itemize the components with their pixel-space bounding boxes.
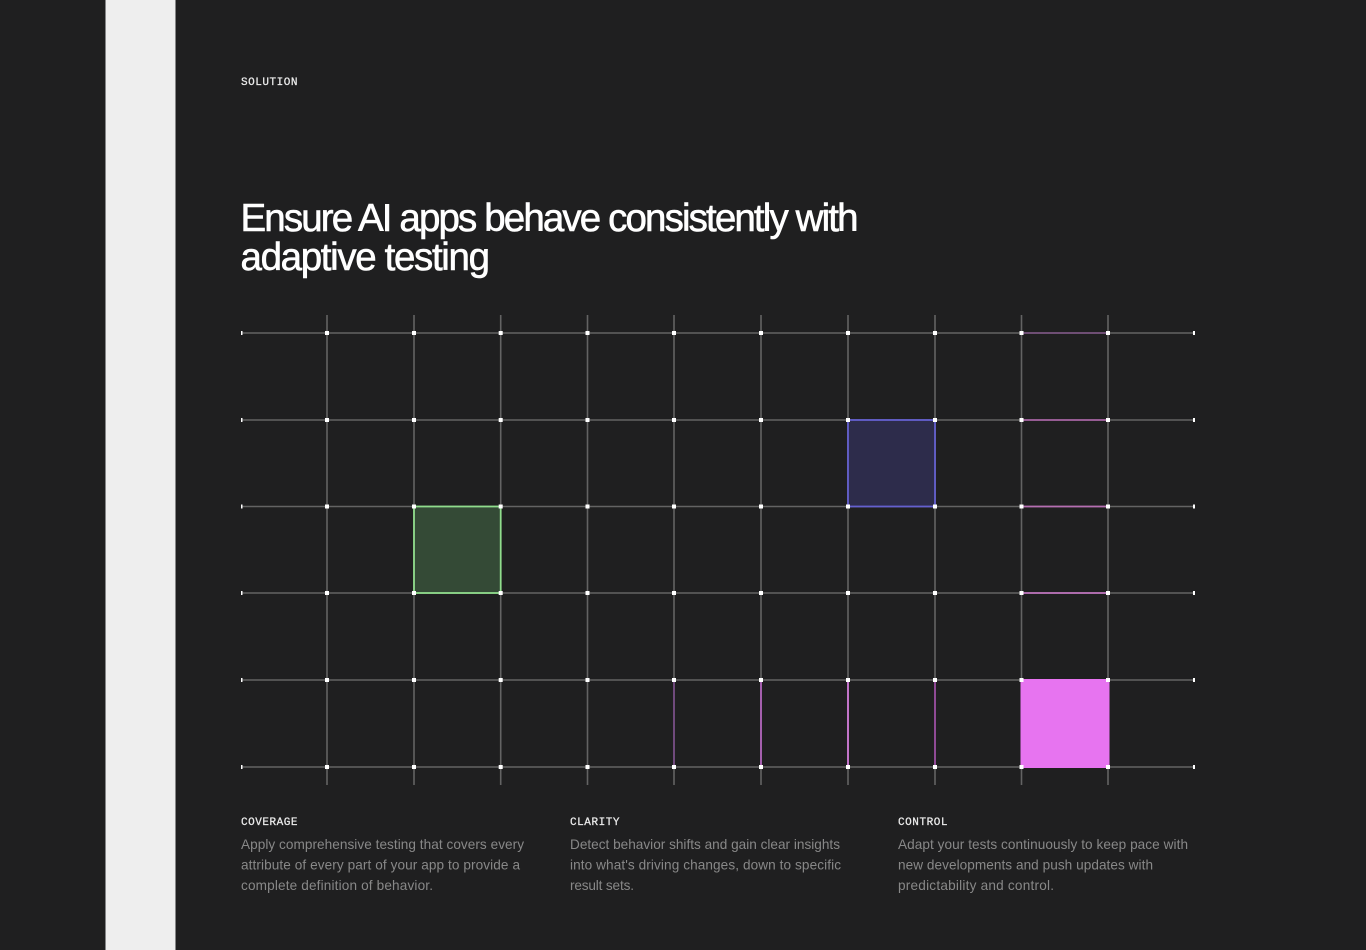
column: clarity <box>570 817 841 893</box>
fading horizontal pink lines <box>1022 333 1108 593</box>
column: coverage: Apply comprehensive testing that covers every <box>241 837 524 852</box>
column: clarity: CLARITY <box>570 817 620 829</box>
column: clarity: Detect behavior shifts and gain clear insights <box>570 837 840 852</box>
node markers <box>241 331 1195 769</box>
light vertical band <box>106 0 176 950</box>
title: adaptive testing <box>240 236 490 279</box>
column: control <box>898 817 1188 893</box>
fading vertical pink lines <box>674 680 935 767</box>
column: control: predictability and control. <box>898 878 1054 893</box>
column: control: CONTROL <box>898 817 948 829</box>
blue highlighted cell <box>848 420 935 506</box>
column: coverage: attribute of every part of your app to provide a <box>241 858 520 872</box>
eyebrow label: SOLUTION <box>241 77 298 89</box>
column: coverage <box>241 817 524 893</box>
column: coverage: COVERAGE <box>241 817 298 829</box>
grid chart <box>241 315 1195 785</box>
column: control: new developments and push updates with <box>898 858 1153 872</box>
green highlighted cell <box>414 506 501 593</box>
solid pink cell <box>1020 679 1110 768</box>
grid lines <box>242 315 1194 785</box>
column: coverage: complete definition of behavior. <box>241 878 433 893</box>
column: clarity: into what's driving changes, down to specific <box>570 858 841 872</box>
column: clarity: result sets. <box>570 878 634 893</box>
title: Ensure AI apps behave consistently with <box>240 197 858 240</box>
title <box>240 197 858 279</box>
column: control: Adapt your tests continuously to keep pace with <box>898 837 1188 852</box>
